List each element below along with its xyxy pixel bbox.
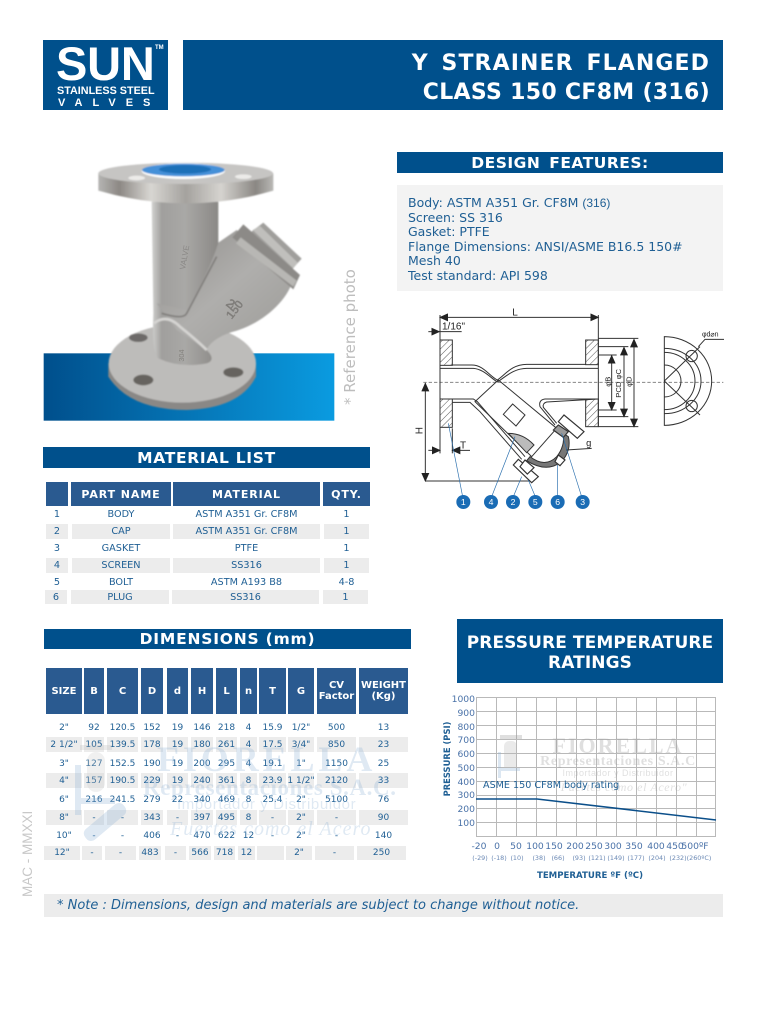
chart: pressure temperature rating: 50 [510,841,522,852]
technical drawing: cross section with numbered callouts: H [415,427,426,434]
table: dimensions: 105 [85,740,103,750]
table: dimensions: 19.1 [262,758,283,768]
technical drawing: cross section with numbered callouts [415,307,724,509]
table: dimensions: 76 [378,794,389,804]
chart: pressure temperature rating: 200 [457,804,475,815]
table: dimensions: 12 [241,848,252,858]
table: material list: 4 [54,560,60,571]
chart watermark [498,733,696,794]
technical drawing: cross section with numbered callouts: T [460,440,466,451]
table: dimensions: 3/4" [292,740,310,750]
table: dimensions: 12" [54,848,70,858]
table: material list: 2 [54,526,60,537]
panel: design features text: Screen: SS 316 [408,210,503,224]
table: dimensions: 361 [218,776,235,786]
chart: pressure temperature rating: -20 [471,841,487,852]
dimensions header row: (Kg) [371,691,396,702]
table: material list: SS316 [230,592,261,602]
chart: pressure temperature rating: (-18) [491,854,507,862]
table: material list: SS316 [231,560,262,571]
table: dimensions: - [174,848,177,858]
chart: pressure temperature rating: (10) [510,854,524,862]
chart watermark: FIORELLA [553,733,683,758]
table: material list: ASTM A351 Gr. CF8M [196,526,297,537]
note bar: * Note : Dimensions, design and materials are subject to change without notice. [57,898,579,913]
chart: pressure temperature rating: (38) [532,854,546,862]
chart: pressure temperature rating: 300 [604,841,622,852]
table: dimensions: 25 [378,758,389,768]
dimensions header row: H [198,686,206,696]
table: dimensions: 92 [88,722,100,732]
watermark over dimensions table [75,739,397,841]
heading: pressure temperature ratings: RATINGS [548,653,632,673]
table: dimensions: 2" [296,812,306,822]
dimensions header row: B [90,686,98,696]
table: dimensions: 152 [143,722,161,732]
product photo: Y strainer on blue band [44,162,334,421]
chart: pressure temperature rating: 800 [457,722,475,733]
table: dimensions: - [92,830,96,840]
table: material list: ASTM A193 B8 [211,577,282,588]
table: dimensions: 22 [172,794,183,804]
callout numbers: 6 [555,497,560,507]
table: dimensions: 295 [218,758,235,768]
table: dimensions: 1 1/2" [287,776,315,786]
table: material list: 1 [54,509,60,520]
technical drawing: cross section with numbered callouts: g [586,438,591,448]
table: dimensions: 622 [218,830,235,840]
table: dimensions: 23.9 [262,776,283,786]
table: dimensions: 229 [143,776,161,786]
panel: design features text: Test standard: API 598 [408,268,548,282]
title banner: Y STRAINER FLANGED [412,51,710,76]
chart watermark: Representaciones S.A.C [540,754,696,769]
table: dimensions: - [121,812,124,822]
table: dimensions: 1" [296,758,306,768]
table: dimensions: 4 [246,758,251,768]
table: material list: BOLT [109,577,133,588]
panel: design features text: Gasket: PTFE [408,224,490,239]
table: dimensions: 4 [246,740,251,750]
chart: pressure temperature rating: (-29) [472,854,488,862]
heading: pressure temperature ratings: PRESSURE TEMPERATURE [467,633,713,653]
table: dimensions: 146 [193,722,211,732]
table: dimensions: 5100 [325,794,348,804]
table: dimensions: 19 [172,740,183,750]
dimensions header row: T [269,686,276,696]
chart: pressure temperature rating: 250 [585,841,603,852]
table: dimensions: 261 [218,740,235,750]
table: material list: PLUG [107,592,133,602]
dimensions header row: C [119,686,126,696]
table: dimensions: 343 [143,812,161,822]
table: dimensions: 12 [243,830,254,840]
table: dimensions: 241.5 [110,794,135,804]
logo: SUN Stainless Steel Valves: SUN [56,37,155,90]
table: dimensions: 25.4 [262,794,283,804]
table: dimensions: 495 [218,812,235,822]
chart: pressure temperature rating: 700 [457,735,475,746]
table: dimensions: 2" [294,848,304,858]
table: dimensions: - [271,812,274,822]
product photo: Y strainer on blue band: 150 [223,297,247,322]
table: dimensions: - [176,812,179,822]
table: dimensions: 157 [85,776,103,786]
chart: pressure temperature rating: 400 [457,777,475,788]
chart: pressure temperature rating: 200 [566,841,584,852]
table: dimensions: 90 [378,812,389,822]
product photo: Y strainer on blue band: 304 [177,349,186,362]
dimensions header row: SIZE [51,686,76,696]
chart: pressure temperature rating: 350 [625,841,643,852]
table: dimensions: 190.5 [110,776,135,786]
chart: pressure temperature rating: 900 [457,708,475,719]
table: material list: 6 [53,592,59,602]
callout numbers: 3 [580,497,585,507]
table: material list: 1 [342,592,349,602]
heading: design features: DESIGN FEATURES: [471,154,649,172]
dimensions header row: L [223,686,230,696]
table: dimensions: 2 1/2" [50,740,78,750]
table: dimensions: 218 [218,722,235,732]
table: dimensions: 17.5 [262,740,283,750]
chart: pressure temperature rating: 0 [494,841,500,852]
chart: pressure temperature rating: (232) [669,854,687,862]
table: dimensions: 19 [172,722,183,732]
table: dimensions: 1150 [325,758,348,768]
table: material list: 1 [343,509,350,520]
note bar [44,894,723,917]
logo: SUN Stainless Steel Valves: VALVES [58,97,160,109]
logo: SUN Stainless Steel Valves: TM [155,45,164,51]
chart: pressure temperature rating: (121) [588,854,606,862]
chart: pressure temperature rating: 500ºF [681,841,709,852]
callout numbers: 2 [511,497,516,507]
dimensions header row: Factor [319,691,354,702]
table: dimensions: 470 [193,830,211,840]
dimensions header row [46,668,408,714]
chart watermark: Fuertes como el Acero" [560,780,688,794]
title banner: CLASS 150 CF8M (316) [423,80,710,105]
table: dimensions: - [335,812,338,822]
table: material list: GASKET [102,543,140,554]
callout numbers: 4 [489,497,494,507]
table: dimensions: 19 [172,758,183,768]
table: dimensions: - [176,830,179,840]
table: material list: 4-8 [339,577,354,588]
table: material list: SCREEN [101,560,141,571]
chart: pressure temperature rating: (260ºC) [687,854,711,862]
technical drawing: cross section with numbered callouts: L [512,307,518,318]
chart: pressure temperature rating: 500 [457,763,475,774]
table: dimensions: - [119,848,122,858]
dimensions header row: CV [329,680,344,691]
table: material list [45,482,370,604]
chart: pressure temperature rating: 300 [457,790,475,801]
table: dimensions: 216 [85,794,103,804]
table: dimensions: 3" [59,758,69,768]
heading: dimensions [44,629,411,649]
technical drawing: cross section with numbered callouts: 1/16" [442,321,465,332]
heading: dimensions: DIMENSIONS (mm) [140,630,315,648]
technical drawing: cross section with numbered callouts: φD [624,376,633,387]
table: material list: PTFE [235,543,258,554]
table: dimensions: 15.9 [262,722,283,732]
table header row: QTY. [331,488,362,500]
panel: design features text: Flange Dimensions: ANSI/ASME B16.5 150# [408,238,683,254]
chart: pressure temperature rating: 100 [457,818,475,829]
table: dimensions: 8 [246,776,251,786]
chart: pressure temperature rating: (66) [551,854,565,862]
table: dimensions: 152.5 [110,758,135,768]
table: dimensions: 2" [59,722,69,732]
table: dimensions: 483 [141,848,159,858]
chart: pressure temperature rating: (93) [572,854,586,862]
table: dimensions: 8 [246,794,251,804]
chart: pressure temperature rating: PRESSURE (PSI) [442,721,452,796]
logo: SUN Stainless Steel Valves: STAINLESS STEEL [57,85,155,97]
table: material list: 5 [54,577,60,588]
table: dimensions: - [333,848,336,858]
side note: reference photo: * Reference photo [341,269,359,405]
table: dimensions: 500 [328,722,345,732]
table: dimensions: 4" [59,776,69,786]
table: dimensions: 178 [143,740,161,750]
table: dimensions: 180 [193,740,211,750]
table: dimensions: 8" [59,812,69,822]
watermark over dimensions table: Representaciones S.A.C. [143,775,397,800]
product photo: Y strainer on blue band: VALVE [178,245,191,270]
dimensions header row: G [297,686,305,696]
title banner [183,40,723,110]
chart: pressure temperature rating: ASME 150 CF8M body rating [483,780,619,791]
table: dimensions: 127 [85,758,103,768]
technical drawing: cross section with numbered callouts: φB [603,377,612,387]
table: dimensions: 279 [143,794,161,804]
chart: pressure temperature rating: 450 [666,841,684,852]
table: dimensions: 6" [59,794,69,804]
table: dimensions: - [121,830,124,840]
chart: pressure temperature rating: 100 [526,841,544,852]
heading: pressure temperature ratings [457,619,723,683]
table: dimensions: 8 [246,812,251,822]
chart: pressure temperature rating: 1000 [452,694,475,705]
table: dimensions: 2120 [325,776,348,786]
table header row: PART NAME [81,488,161,500]
technical drawing: cross section with numbered callouts: PCD φC [614,368,623,398]
table: dimensions: 13 [378,722,389,732]
table header row: MATERIAL [212,488,281,500]
table: dimensions: 240 [193,776,211,786]
table: dimensions: 120.5 [110,722,135,732]
callout numbers: 5 [533,497,538,507]
vertical side text: MAC - MMXXI [20,811,35,897]
watermark over dimensions table: Importador y Distribuidor [177,796,356,813]
table: material list: 1 [343,543,350,554]
chart: pressure temperature rating: 150 [545,841,563,852]
table: material list: BODY [108,509,134,520]
table: dimensions: 139.5 [110,740,135,750]
table: material list: ASTM A351 Gr. CF8M [196,509,297,520]
heading: design features [397,152,723,173]
watermark over dimensions table: FIORELLA [157,739,376,779]
chart: pressure temperature rating: (204) [648,854,666,862]
table: material list: 1 [343,560,350,571]
heading: material list: MATERIAL LIST [137,449,276,467]
table: dimensions: 2" [296,830,306,840]
table: dimensions: 566 [191,848,209,858]
product photo: Y strainer on blue band: 2 [223,296,238,312]
table: dimensions: 1/2" [292,722,310,732]
panel: design features text [397,185,723,291]
table: dimensions: 469 [218,794,235,804]
heading: material list [43,447,370,468]
table: dimensions [44,668,408,860]
dimensions header row: n [245,686,252,696]
table: material list: 3 [54,543,60,554]
callout numbers: 1 [461,497,466,507]
table: dimensions: - [90,848,94,858]
table: dimensions: 190 [143,758,161,768]
table: dimensions: 200 [193,758,211,768]
panel: design features text: Body: ASTM A351 Gr. CF8M (316) [408,195,610,210]
table: dimensions: 850 [328,740,345,750]
chart watermark: Importador y Distribuidor [562,768,674,778]
table: dimensions: 33 [378,776,389,786]
table: dimensions: 140 [375,830,392,840]
table: dimensions: 10" [56,830,72,840]
table: dimensions: - [92,812,96,822]
dimensions header row: d [174,686,181,696]
rating line [476,799,716,820]
table: dimensions: 406 [143,830,161,840]
chart: pressure temperature rating: 400 [647,841,665,852]
chart: pressure temperature rating: (149) [607,854,625,862]
watermark over dimensions table: Fuertes como el Acero [170,818,372,840]
chart: pressure temperature rating: TEMPERATURE ºF (ºC) [537,871,643,881]
callout numbers [456,495,590,509]
dimensions header row: D [148,686,156,696]
table: dimensions: - [271,830,274,840]
table: material list: 1 [343,526,350,537]
table: dimensions: 250 [373,848,390,858]
table header row [46,482,370,506]
table: material list: CAP [111,526,131,537]
table: dimensions: 19 [172,776,183,786]
logo: SUN Stainless Steel Valves [43,40,168,110]
table: dimensions: 4 [246,722,251,732]
table: dimensions: 397 [193,812,211,822]
chart: pressure temperature rating: 600 [457,749,475,760]
chart: pressure temperature rating: (177) [627,854,645,862]
table: dimensions: 2" [296,794,306,804]
table: dimensions: - [335,830,338,840]
table: dimensions: 340 [193,794,211,804]
table: dimensions: 23 [378,740,389,750]
table: dimensions: 718 [216,848,233,858]
technical drawing: cross section with numbered callouts: φd⌀n [702,332,719,339]
dimensions header row: WEIGHT [361,680,406,691]
panel: design features text: Mesh 40 [408,253,461,268]
